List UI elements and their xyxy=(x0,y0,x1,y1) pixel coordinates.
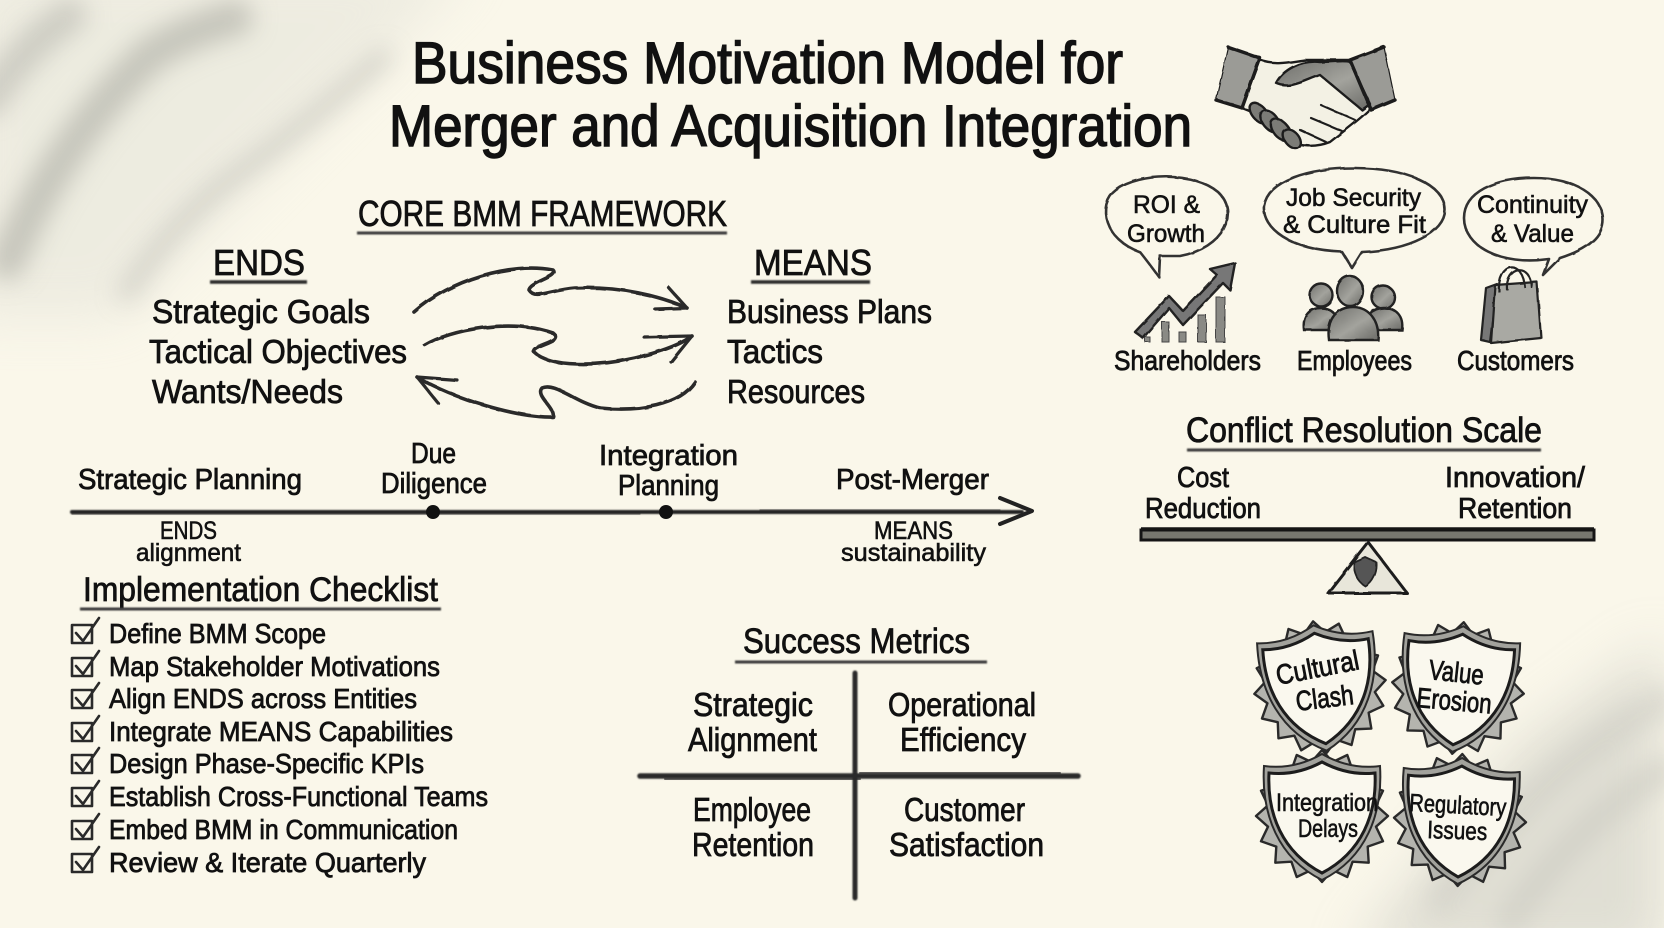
phase: strategic planning: alignment xyxy=(136,539,241,567)
title: Business Motivation Model for xyxy=(412,31,1123,96)
checklist items: Map Stakeholder Motivations xyxy=(109,651,440,682)
icon: growth chart xyxy=(1135,263,1235,342)
scale label: innovation retention xyxy=(1445,462,1586,525)
bottom-right shading xyxy=(1350,640,1664,928)
badge: integration delays xyxy=(1256,750,1388,882)
panel: stakeholders xyxy=(1106,168,1603,376)
speech bubble: shareholders: Growth xyxy=(1127,220,1205,248)
phase: due diligence xyxy=(381,438,487,519)
icon: employees group xyxy=(1304,276,1402,340)
phase: due diligence: Diligence xyxy=(381,468,487,500)
metric: customer satisfaction: Customer xyxy=(904,791,1025,828)
badge: value erosion: Value xyxy=(1427,654,1485,691)
badge: cultural clash xyxy=(1247,614,1393,760)
badge: value erosion: Erosion xyxy=(1415,682,1493,720)
metric: customer satisfaction xyxy=(889,791,1044,863)
metric: employee retention xyxy=(692,791,814,863)
scale label: cost reduction: Cost xyxy=(1177,462,1229,494)
scale label: cost reduction: Reduction xyxy=(1145,493,1261,525)
arrows: ends to means cycle xyxy=(414,268,695,417)
phase: strategic planning xyxy=(78,464,302,567)
metric: operational efficiency: Operational xyxy=(888,686,1036,723)
metric: operational efficiency: Efficiency xyxy=(900,721,1026,758)
icon: handshake xyxy=(1216,47,1395,152)
metric: strategic alignment: Strategic xyxy=(693,686,813,723)
ends column: Strategic Goals xyxy=(152,293,370,330)
speech bubble: customers xyxy=(1464,178,1603,275)
metric: strategic alignment: Alignment xyxy=(688,721,817,758)
badge: regulatory issues xyxy=(1392,752,1528,888)
heading: implementation checklist: Implementation Checklist xyxy=(83,571,439,609)
title xyxy=(389,31,1192,159)
quadrant cross xyxy=(640,673,1078,898)
speech bubble: employees: & Culture Fit xyxy=(1283,211,1426,239)
speech bubble: employees xyxy=(1264,168,1445,268)
panel: success metrics xyxy=(640,622,1078,898)
badge: regulatory issues: Issues xyxy=(1427,816,1488,846)
title: Merger and Acquisition Integration xyxy=(389,94,1192,159)
badge: integration delays: Delays xyxy=(1298,815,1358,843)
means column: Business Plans xyxy=(727,293,932,330)
checklist items: Design Phase-Specific KPIs xyxy=(109,748,424,779)
phase: post-merger: sustainability xyxy=(841,539,986,567)
badge: integration delays: Integration xyxy=(1276,789,1378,817)
scale label: innovation retention: Innovation/ xyxy=(1445,462,1586,494)
icon: shopping bag xyxy=(1481,267,1541,343)
speech bubble: customers: Continuity xyxy=(1477,191,1588,219)
phase: integration planning: Planning xyxy=(618,470,719,502)
checklist items: Establish Cross-Functional Teams xyxy=(109,781,488,812)
panel: conflict resolution scale xyxy=(1141,411,1594,593)
phase: integration planning: Integration xyxy=(599,440,738,472)
speech bubble: customers: & Value xyxy=(1491,220,1574,248)
means column: Resources xyxy=(727,373,865,410)
checklist items: Integrate MEANS Capabilities xyxy=(109,716,453,747)
ends column: Tactical Objectives xyxy=(149,333,407,370)
phase: integration planning xyxy=(599,440,738,519)
ends column xyxy=(149,242,407,410)
badge: cultural clash: Cultural xyxy=(1273,644,1362,691)
phase: strategic planning: Strategic Planning xyxy=(78,464,302,496)
checklist items: Embed BMM in Communication xyxy=(109,814,458,845)
phase: due diligence: Due xyxy=(411,438,456,470)
speech bubble: shareholders xyxy=(1106,177,1228,277)
metric: employee retention: Retention xyxy=(692,826,814,863)
panel: risk badges xyxy=(1247,614,1530,888)
metric: strategic alignment xyxy=(688,686,817,758)
stakeholder labels xyxy=(1114,345,1574,376)
panel: core BMM framework xyxy=(149,193,932,417)
panel: implementation checklist xyxy=(72,571,488,878)
scale beam xyxy=(1141,529,1594,540)
badge: cultural clash: Clash xyxy=(1294,679,1355,717)
ends column: Wants/Needs xyxy=(152,373,343,410)
stakeholder labels: Shareholders xyxy=(1114,345,1261,376)
stakeholder labels: Customers xyxy=(1457,345,1574,376)
speech bubble: employees: Job Security xyxy=(1286,184,1421,212)
timeline xyxy=(72,438,1032,567)
metric: customer satisfaction: Satisfaction xyxy=(889,826,1044,863)
phase: post-merger xyxy=(836,464,989,567)
means column: MEANS xyxy=(754,242,872,283)
scale label: innovation retention: Retention xyxy=(1458,493,1572,525)
phase: strategic planning: ENDS xyxy=(160,517,217,545)
scale label: cost reduction xyxy=(1145,462,1261,525)
checklist items: Review & Iterate Quarterly xyxy=(109,847,426,878)
heading: core framework: CORE BMM FRAMEWORK xyxy=(358,193,727,234)
scale fulcrum with shield xyxy=(1328,542,1407,593)
checklist items: Define BMM Scope xyxy=(109,618,326,649)
speech bubble: shareholders: ROI & xyxy=(1133,191,1200,219)
checklist items xyxy=(109,618,488,878)
heading: success metrics: Success Metrics xyxy=(743,622,970,661)
phase: post-merger: MEANS xyxy=(874,517,953,545)
metric: employee retention: Employee xyxy=(693,791,811,828)
means column: Tactics xyxy=(727,333,823,370)
means column xyxy=(727,242,932,410)
checklist items: Align ENDS across Entities xyxy=(109,683,417,714)
badge: value erosion xyxy=(1386,616,1530,760)
ends column: ENDS xyxy=(213,242,305,283)
timeline arrow xyxy=(72,498,1032,524)
badge: regulatory issues: Regulatory xyxy=(1409,789,1507,822)
heading: conflict resolution scale: Conflict Resolution Scale xyxy=(1186,411,1542,450)
metric: operational efficiency xyxy=(888,686,1036,758)
phase: post-merger: Post-Merger xyxy=(836,464,989,496)
checkboxes xyxy=(72,618,99,872)
stakeholder labels: Employees xyxy=(1297,345,1412,376)
